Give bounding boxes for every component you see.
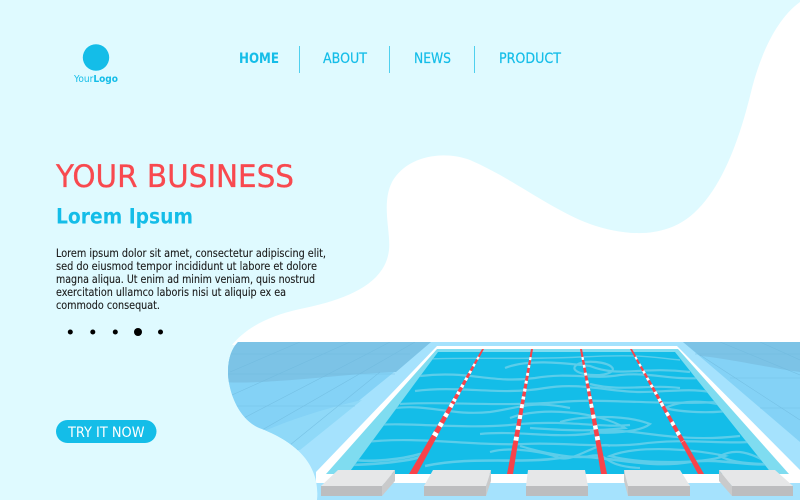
starting block 2 (424, 470, 491, 496)
left floor tiles (220, 342, 431, 452)
body text (56, 246, 326, 312)
swimming pool (220, 342, 800, 500)
starting block 3 (526, 470, 588, 496)
button shape (56, 420, 156, 443)
logo text: YourLogo (73, 74, 118, 85)
body text: commodo consequat. (56, 298, 160, 312)
nav home: HOME (239, 51, 279, 67)
logo (73, 44, 118, 85)
starting block 1 (321, 470, 395, 496)
body text: sed do eiusmod tempor incididunt ut labore et dolore (56, 259, 317, 273)
pool deck (220, 342, 800, 500)
pool water (348, 352, 772, 474)
nav news: NEWS (414, 51, 451, 67)
water ripples (350, 356, 775, 468)
title: YOUR BUSINESS (55, 159, 294, 195)
lane ropes (409, 349, 704, 474)
button label: TRY IT NOW (67, 425, 145, 441)
pool inner edge (326, 349, 789, 474)
starting block 4 (624, 470, 690, 496)
button (56, 420, 156, 443)
body text: exercitation ullamco laboris nisi ut aliquip ex ea (56, 285, 286, 299)
white wave shape (232, 2, 800, 345)
carousel dots (68, 328, 163, 336)
right floor tiles (683, 342, 800, 442)
subtitle: Lorem Ipsum (56, 204, 193, 228)
pool white border (316, 346, 800, 483)
body text: Lorem ipsum dolor sit amet, consectetur adipiscing elit, (56, 246, 326, 260)
body text: magna aliqua. Ut enim ad minim veniam, quis nostrud (56, 272, 315, 286)
nav product: PRODUCT (499, 51, 561, 67)
logo circle (83, 44, 109, 71)
navigation (239, 46, 561, 73)
starting block 5 (719, 470, 793, 496)
nav about: ABOUT (323, 51, 367, 67)
